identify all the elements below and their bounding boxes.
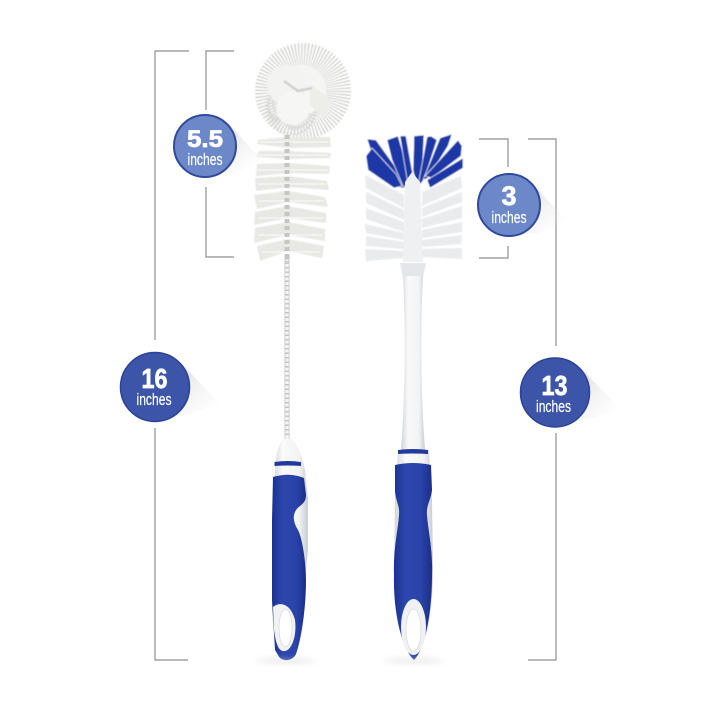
white bristles [365,175,462,261]
bracket: 13 inch overall length [528,139,556,660]
bristle streaks [258,142,328,252]
badge: 13 inches: inches [536,397,571,416]
hanging loop [401,599,426,655]
bristle core twist [284,135,290,262]
hanging loop [273,604,295,651]
neck [400,263,426,278]
badge: 13 inches [520,358,620,427]
badge: 3 inches: 3 [502,181,516,211]
badge: 3 inches: inches [492,208,526,227]
white handle body [272,438,308,660]
badge: 5.5 inches: inches [188,150,222,169]
bracket: 3 inch head length [479,139,508,258]
blue grip [272,475,306,660]
wire stem [284,255,290,440]
loop opening [279,609,292,647]
badge: 16 inches: inches [136,390,172,409]
shaft [401,276,425,450]
badge: 5.5 inches [174,115,262,177]
badge: 5.5 inches: 5.5 [187,126,223,153]
bristle core [403,172,423,262]
badge: 13 inches: 13 [542,370,568,401]
blue ring [274,461,301,466]
blue bristles [366,134,463,188]
brush: long wire brush with round tip [254,57,337,660]
badge: 3 inches [478,174,566,236]
ground shadows [256,659,444,663]
spiral bristles [254,137,331,261]
blue grip [394,463,432,660]
badge: 16 inches [120,352,220,422]
badge: 16 inches: 16 [142,363,168,394]
round bristle head [267,57,337,126]
white handle body [394,450,433,660]
bracket: 5.5 inch head length [206,51,234,257]
bracket: 16 inch overall length [155,51,189,660]
brush: short blue and white brush [365,134,463,660]
blue ring [398,449,428,454]
loop opening [406,609,421,651]
